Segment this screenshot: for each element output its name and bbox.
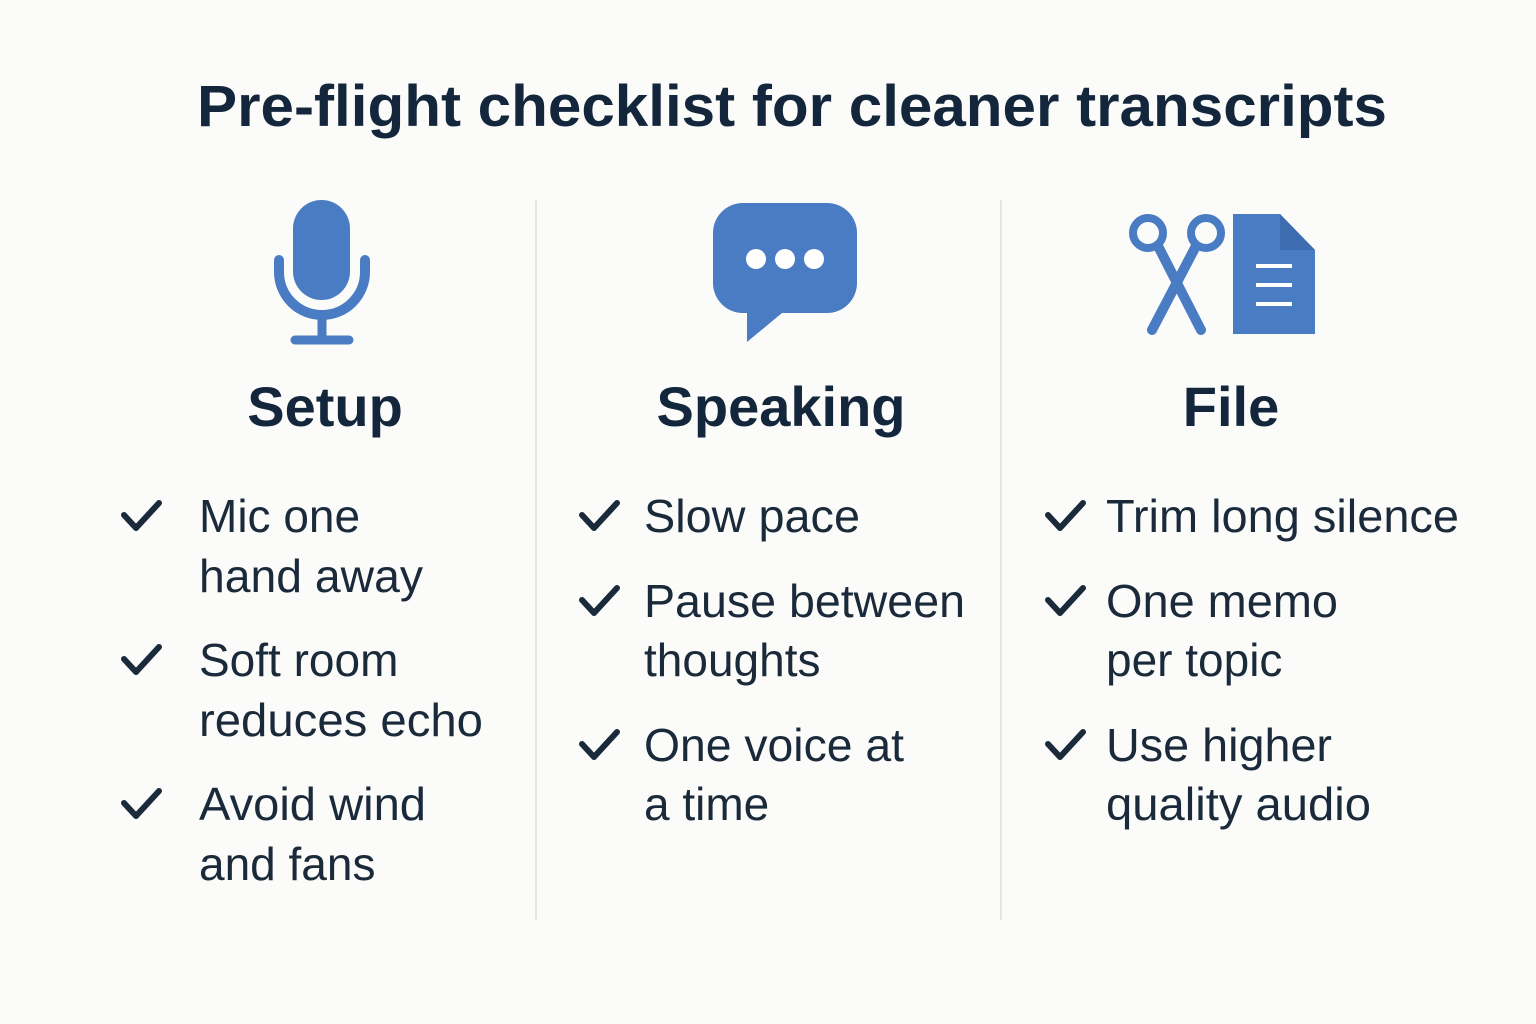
checklist: file: per topic: [1106, 634, 1282, 686]
checklist: setup: hand away: [199, 550, 423, 602]
checklist: file: Use higher: [1106, 719, 1332, 771]
checklist: speaking: a time: [644, 778, 769, 830]
checklist: file: [1048, 490, 1459, 830]
checklist: setup: reduces echo: [199, 694, 483, 746]
checklist: file: One memo: [1106, 575, 1338, 627]
checklist: speaking: Slow pace: [644, 490, 860, 542]
checklist: speaking: thoughts: [644, 634, 820, 686]
checklist: speaking: One voice at: [644, 719, 904, 771]
heading: speaking: Speaking: [657, 375, 905, 438]
title: Pre-flight checklist for cleaner transcripts: [197, 74, 1387, 139]
checklist: setup: Avoid wind: [199, 778, 426, 830]
checklist: setup: Mic one: [199, 490, 360, 542]
checklist: setup: [124, 490, 483, 890]
checklist: setup: and fans: [199, 838, 375, 890]
checklist: file: quality audio: [1106, 778, 1371, 830]
icon: speech bubble: [713, 203, 857, 342]
checklist: setup: Soft room: [199, 634, 398, 686]
heading: setup: Setup: [247, 375, 403, 438]
panel: setup: [124, 200, 483, 890]
checklist: speaking: [582, 490, 965, 830]
icon: scissors and document: [1133, 214, 1315, 334]
panel: speaking: [582, 203, 965, 830]
icon: microphone: [279, 200, 365, 340]
checklist: file: Trim long silence: [1106, 490, 1459, 542]
checklist: speaking: Pause between: [644, 575, 965, 627]
panel: file: [1048, 214, 1459, 830]
heading: file: File: [1183, 375, 1279, 438]
